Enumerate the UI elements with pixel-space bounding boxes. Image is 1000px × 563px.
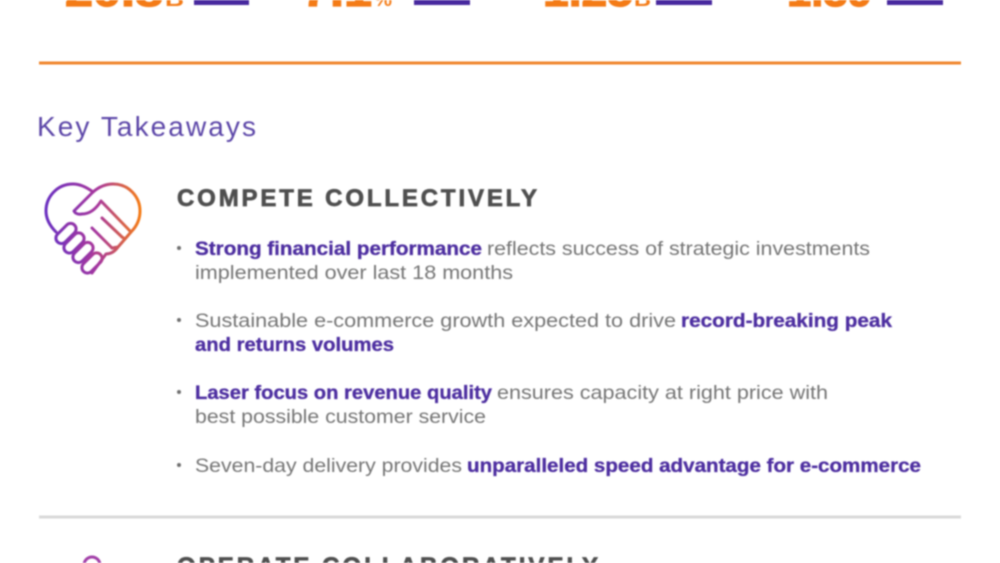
bullet 3 xyxy=(177,382,828,428)
icon: heart handshake xyxy=(46,184,140,275)
bullet 3: Laser focus on revenue quality xyxy=(195,382,492,404)
bullet 3: best possible customer service xyxy=(195,406,486,428)
bullet 2 xyxy=(177,310,892,356)
top statistics row xyxy=(65,0,943,15)
bullet 1: implemented over last 18 months xyxy=(195,262,513,284)
bullet 1: Strong financial performance xyxy=(195,238,482,260)
bullet 2: Sustainable e-commerce growth expected to drive xyxy=(195,310,676,332)
stat 1 xyxy=(65,0,249,15)
stat 3 xyxy=(543,0,712,15)
bullet 4: Seven-day delivery provides xyxy=(195,455,462,477)
bullet 3: ensures capacity at right price with xyxy=(497,382,828,404)
bullet 4 xyxy=(177,455,921,477)
bullet 1 xyxy=(177,238,870,284)
bullet 4: unparalleled speed advantage for e-commerce xyxy=(467,455,921,477)
bullet 2: and returns volumes xyxy=(195,334,394,356)
section: compete collectively xyxy=(177,185,921,477)
heading: Key Takeaways: Key Takeaways xyxy=(37,111,256,142)
bullet 1: reflects success of strategic investments xyxy=(487,238,870,260)
bullet 2: record-breaking peak xyxy=(681,310,892,332)
stat 2 xyxy=(302,0,470,15)
stat 4 xyxy=(787,0,943,15)
icon: location pin xyxy=(84,557,100,563)
section heading: COMPETE COLLECTIVELY xyxy=(177,185,537,212)
